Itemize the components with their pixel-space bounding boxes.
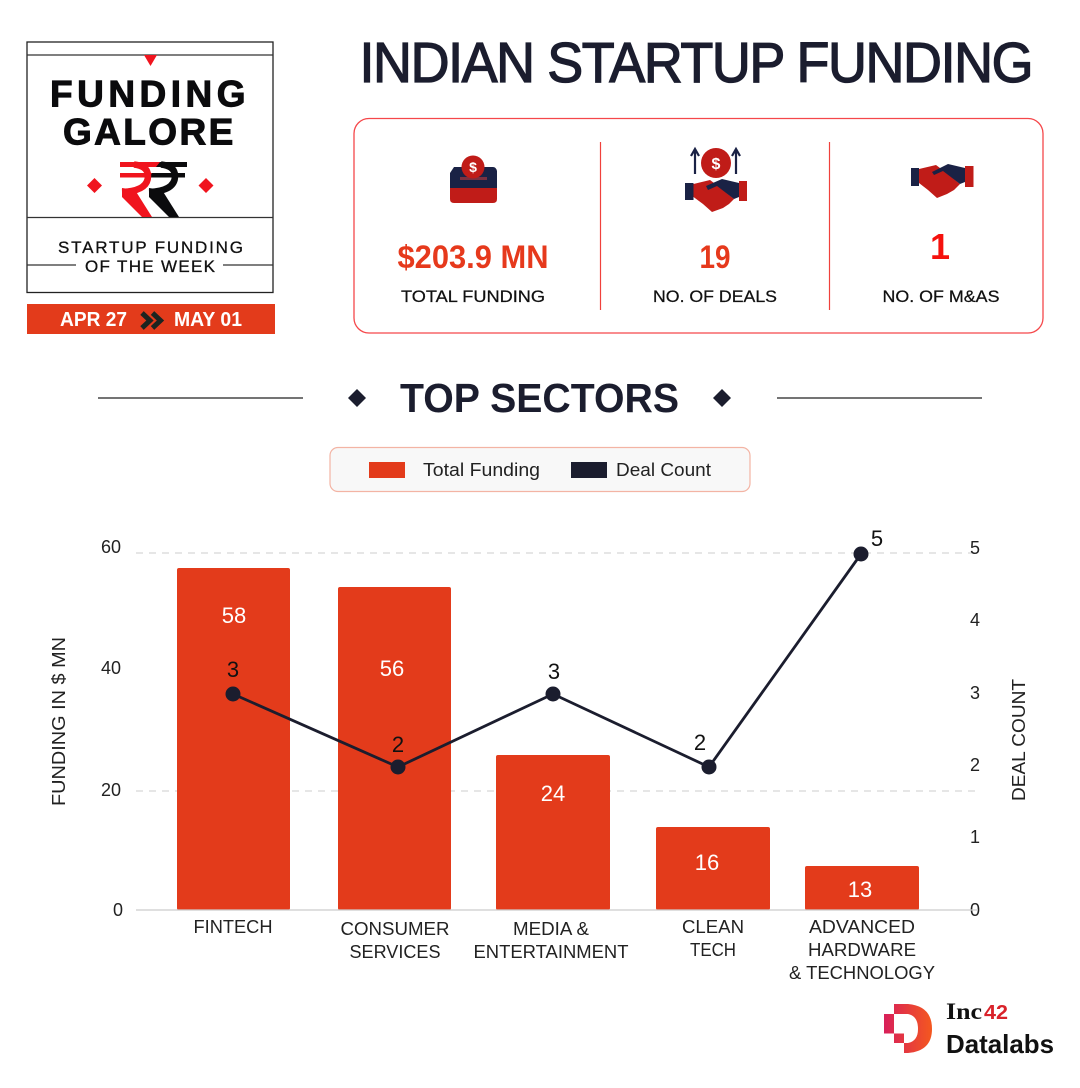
category labels: SERVICES (350, 942, 440, 962)
value: total funding: $203.9 MN (398, 239, 548, 275)
badge title: GALORE (63, 112, 236, 152)
title: INDIAN STARTUP FUNDING (360, 31, 1032, 94)
category labels: HARDWARE (808, 940, 916, 960)
right axis: 5 (970, 538, 980, 558)
logo: inc42 datalabs: 42 (984, 1002, 1008, 1024)
category labels: ADVANCED (809, 917, 915, 937)
icon: datalabs mark (884, 1004, 932, 1053)
bar values: 13 (848, 877, 872, 902)
wordmark: Inc (946, 999, 982, 1024)
date banner: APR 27 (60, 309, 127, 331)
category labels: ENTERTAINMENT (474, 942, 628, 962)
badge subtitle (58, 238, 243, 276)
label: mergers and acquisitions: NO. OF M&AS (882, 287, 1000, 306)
right axis: 4 (970, 610, 980, 630)
deal count line: 3 (548, 659, 560, 684)
heading: top sectors (98, 375, 982, 421)
badge: funding galore (27, 42, 273, 292)
deal count line: 2 (392, 732, 404, 757)
label: total funding: TOTAL FUNDING (401, 287, 545, 306)
icon: double chevron (142, 313, 160, 328)
left axis: 20 (101, 780, 121, 800)
left axis (49, 537, 123, 920)
badge title: FUNDING (50, 74, 250, 114)
category labels: CONSUMER (340, 919, 450, 939)
badge subtitle: OF THE WEEK (85, 257, 216, 276)
metric: total funding (398, 156, 548, 306)
right axis: 2 (970, 755, 980, 775)
bar values (222, 603, 872, 902)
heading: top sectors: TOP SECTORS (400, 375, 679, 421)
left axis: 60 (101, 537, 121, 557)
category labels: TECH (690, 940, 736, 960)
icon: handshake with coin (685, 148, 747, 212)
left axis: FUNDING IN $ MN (49, 637, 69, 806)
bar values: 16 (695, 850, 719, 875)
category labels: & TECHNOLOGY (789, 963, 935, 983)
value: deals: 19 (700, 239, 730, 275)
date banner: MAY 01 (174, 309, 242, 331)
category labels (194, 917, 935, 983)
chart: funding and deal count by sector (49, 526, 1029, 983)
legend: Total Funding (423, 460, 540, 480)
right axis: 0 (970, 900, 980, 920)
icon: red notch (144, 55, 157, 66)
deal count line: 2 (694, 730, 706, 755)
bar values: 58 (222, 603, 246, 628)
icon: handshake (911, 164, 974, 198)
deal count line (226, 526, 883, 774)
legend: Deal Count (616, 460, 711, 480)
date banner (27, 304, 275, 334)
deal count line: 5 (871, 526, 883, 551)
metric: deals (653, 148, 777, 306)
bars (177, 568, 919, 910)
right axis (970, 538, 1029, 920)
left axis: 0 (113, 900, 123, 920)
right axis: 1 (970, 827, 980, 847)
icon: donation box: $ (469, 159, 477, 175)
right axis: DEAL COUNT (1009, 679, 1029, 801)
panel: key metrics (354, 118, 1043, 333)
icon: donation box (450, 156, 497, 203)
legend (330, 448, 750, 492)
value: mergers and acquisitions: 1 (930, 226, 950, 267)
bar values: 56 (380, 656, 404, 681)
badge title (50, 74, 250, 152)
logo: inc42 datalabs: Datalabs (946, 1029, 1054, 1059)
category labels: FINTECH (194, 917, 272, 937)
icon: rupee symbols (87, 162, 214, 217)
label: deals: NO. OF DEALS (653, 287, 777, 306)
category labels: CLEAN (682, 917, 744, 937)
right axis: 3 (970, 683, 980, 703)
category labels: MEDIA & (513, 919, 589, 939)
bar values: 24 (541, 781, 565, 806)
metric: mergers and acquisitions (882, 164, 1000, 306)
deal count line: 3 (227, 657, 239, 682)
logo: inc42 datalabs (884, 999, 1054, 1059)
badge subtitle: STARTUP FUNDING (58, 238, 243, 257)
icon: handshake with coin: $ (712, 156, 721, 173)
left axis: 40 (101, 658, 121, 678)
